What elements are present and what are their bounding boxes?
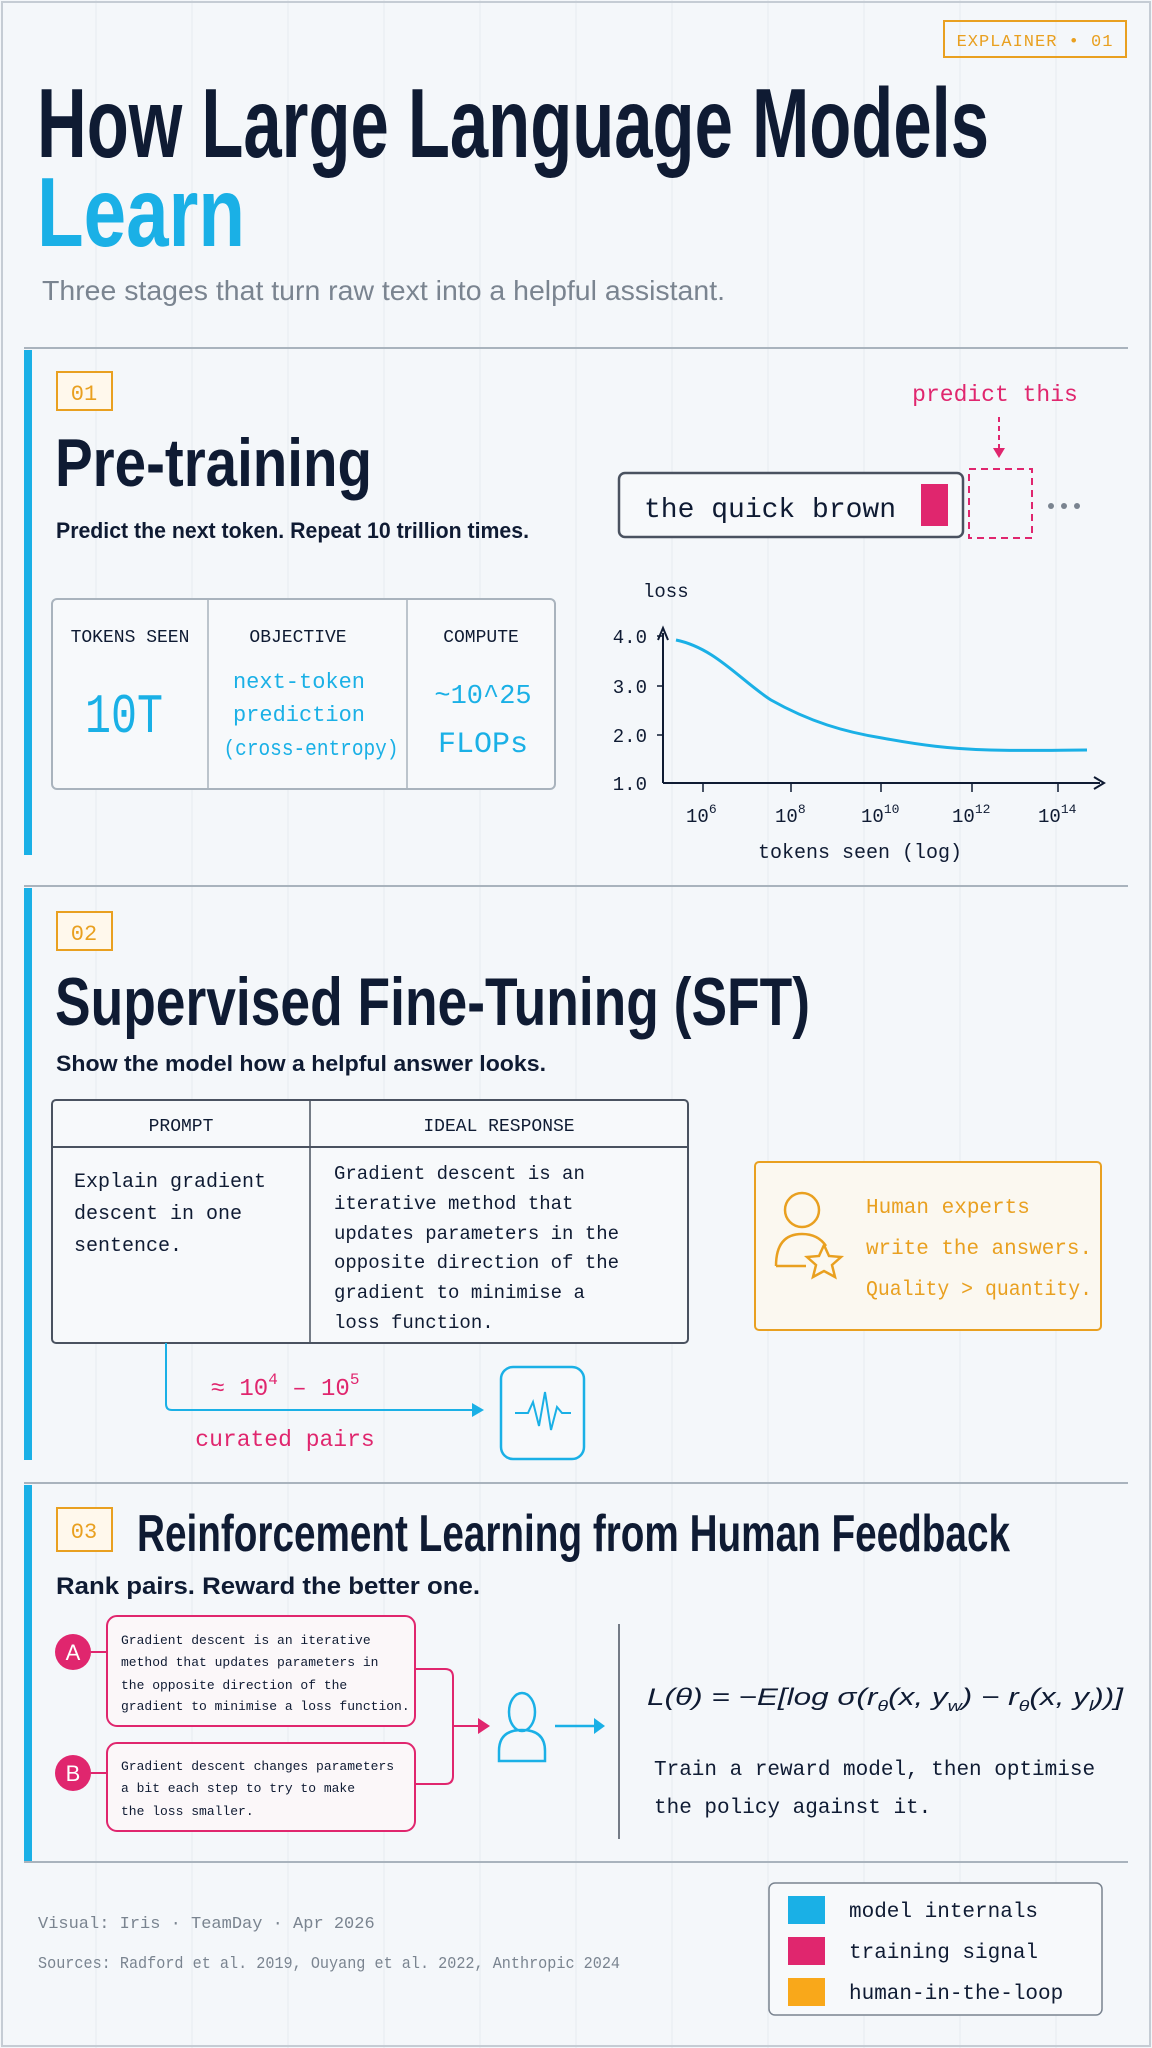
chart: loss curve: 10 [686, 806, 709, 828]
chart: loss curve: 10 [952, 806, 975, 828]
panel: supervised fine-tuning [24, 888, 1101, 1460]
prompt/response table: Explain gradient [74, 1171, 266, 1194]
stats table: next-token [233, 670, 365, 695]
callout: curated pairs: ≈ 10 [211, 1376, 268, 1403]
chart: loss curve: tokens seen (log) [758, 842, 962, 865]
callout: human experts [755, 1162, 1101, 1330]
formula: reward model loss: L(θ) = −E[log σ(r [647, 1684, 823, 1711]
response A: gradient to minimise a loss function. [121, 1699, 410, 1714]
chart: loss curve: 10 [775, 806, 798, 828]
stats table: ~10^25 [434, 682, 532, 712]
chart: loss curve [613, 581, 1104, 865]
prompt/response table: sentence. [74, 1235, 182, 1258]
response A: Gradient descent is an iterative [121, 1633, 371, 1648]
subheading: Rank pairs. Reward the better one. [56, 1573, 480, 1600]
stats table: prediction [233, 703, 365, 728]
arrow: table to model [166, 1343, 484, 1417]
chart: loss curve: 4.0 [613, 627, 647, 649]
legend: human-in-the-loop [849, 1983, 1063, 2006]
heading: pre-training: Pre-training [55, 425, 372, 501]
formula: reward model loss: (x, y [888, 1684, 950, 1711]
arrow: to reward model [555, 1718, 605, 1734]
formula: reward model loss: l [1089, 1698, 1094, 1715]
callout: predict this [912, 382, 1078, 458]
chart: loss curve: 6 [709, 802, 717, 817]
response A: A [66, 1640, 81, 1665]
response B [55, 1743, 415, 1831]
stats table: TOKENS SEEN [71, 628, 189, 648]
token sequence [619, 469, 1080, 538]
icon: human labeller [499, 1693, 545, 1761]
token sequence: the quick brown [644, 495, 896, 526]
prompt/response table: iterative method that [334, 1193, 573, 1215]
legend: training signal [849, 1942, 1038, 1965]
stats table [52, 599, 555, 789]
badge 02 [57, 912, 112, 950]
panel: pre-training [24, 350, 1104, 865]
callout: curated pairs: – 10 [278, 1376, 350, 1403]
legend [769, 1883, 1102, 2015]
tag: explainer 01: EXPLAINER • 01 [957, 33, 1113, 52]
stats table: (cross-entropy) [224, 737, 398, 762]
chart: loss curve: 8 [798, 802, 806, 817]
chart: loss curve: 1.0 [613, 774, 647, 796]
badge 01 [57, 372, 112, 410]
tag: explainer 01 [944, 21, 1126, 57]
badge 03 [57, 1508, 112, 1551]
badge 03: 03 [71, 1520, 97, 1545]
response B: the loss smaller. [121, 1804, 254, 1819]
subheading: Show the model how a helpful answer looks. [56, 1051, 546, 1076]
callout: human experts: write the answers. [866, 1238, 1092, 1261]
footer credits: Sources: Radford et al. 2019, Ouyang et al. 2022, Anthropic 2024 [38, 1955, 620, 1974]
prompt/response table: Gradient descent is an [334, 1163, 585, 1185]
footer credits [38, 1915, 620, 1974]
prompt/response table [52, 1100, 688, 1343]
response A [55, 1616, 415, 1726]
formula: reward model loss: ) − r [958, 1684, 1020, 1711]
subtitle: Three stages that turn raw text into a helpful assistant. [42, 275, 725, 306]
stats table: FLOPs [438, 728, 528, 762]
response B: B [66, 1761, 80, 1786]
response B: a bit each step to try to make [121, 1781, 355, 1796]
text: train reward model: the policy against it. [654, 1797, 931, 1820]
callout: predict this: predict this [912, 382, 1078, 408]
prompt/response table: opposite direction of the [334, 1252, 619, 1274]
arrow: bracket to labeller [415, 1669, 490, 1784]
callout: human experts: Human experts [866, 1197, 1030, 1220]
text: train reward model [654, 1759, 1095, 1820]
stats table: OBJECTIVE [249, 628, 347, 648]
stats table: COMPUTE [443, 628, 519, 648]
text: train reward model: Train a reward model, then optimise [654, 1759, 1095, 1782]
prompt/response table: loss function. [334, 1312, 494, 1334]
subheading: Predict the next token. Repeat 10 trillion times. [56, 518, 529, 543]
prompt/response table: updates parameters in the [334, 1223, 619, 1245]
icon: person with star [776, 1193, 841, 1277]
prompt/response table: PROMPT [149, 1117, 214, 1137]
callout: curated pairs: curated pairs [195, 1427, 375, 1453]
callout: human experts: Quality > quantity. [866, 1279, 1092, 1302]
prompt/response table: descent in one [74, 1203, 242, 1226]
chart: loss curve: 3.0 [613, 677, 647, 699]
callout: curated pairs: 4 [268, 1371, 278, 1389]
formula: reward model loss: θ [877, 1698, 888, 1715]
chart: loss curve: 12 [975, 802, 990, 817]
stats table: 10T [85, 685, 163, 749]
formula: reward model loss: θ [1019, 1698, 1029, 1715]
response A: method that updates parameters in [121, 1655, 378, 1670]
footer credits: Visual: Iris · TeamDay · Apr 2026 [38, 1915, 375, 1934]
legend: model internals [849, 1901, 1038, 1924]
title: Learn [37, 157, 245, 267]
chart: loss curve: 10 [1038, 806, 1061, 828]
heading: SFT: Supervised Fine-Tuning (SFT) [55, 964, 810, 1040]
formula: reward model loss: w [948, 1698, 963, 1715]
formula: reward model loss: (x, y [1029, 1684, 1092, 1711]
badge 02: 02 [71, 922, 97, 947]
callout: curated pairs [195, 1371, 375, 1453]
response A: the opposite direction of the [121, 1678, 347, 1693]
chart: loss curve: 2.0 [613, 726, 647, 748]
chart: loss curve: 14 [1061, 802, 1077, 817]
formula: reward model loss: ))] [1089, 1684, 1125, 1711]
icon: model waveform [501, 1367, 584, 1459]
panel: RLHF [24, 1485, 1125, 1862]
title [37, 68, 989, 267]
chart: loss curve: 10 [861, 806, 884, 828]
response B: Gradient descent changes parameters [121, 1759, 394, 1774]
prompt/response table: IDEAL RESPONSE [423, 1117, 575, 1137]
callout: curated pairs: 5 [350, 1371, 359, 1389]
chart: loss curve: loss [643, 581, 689, 603]
prompt/response table: gradient to minimise a [334, 1282, 585, 1304]
badge 01: 01 [71, 382, 97, 407]
chart: loss curve: 10 [884, 802, 899, 817]
